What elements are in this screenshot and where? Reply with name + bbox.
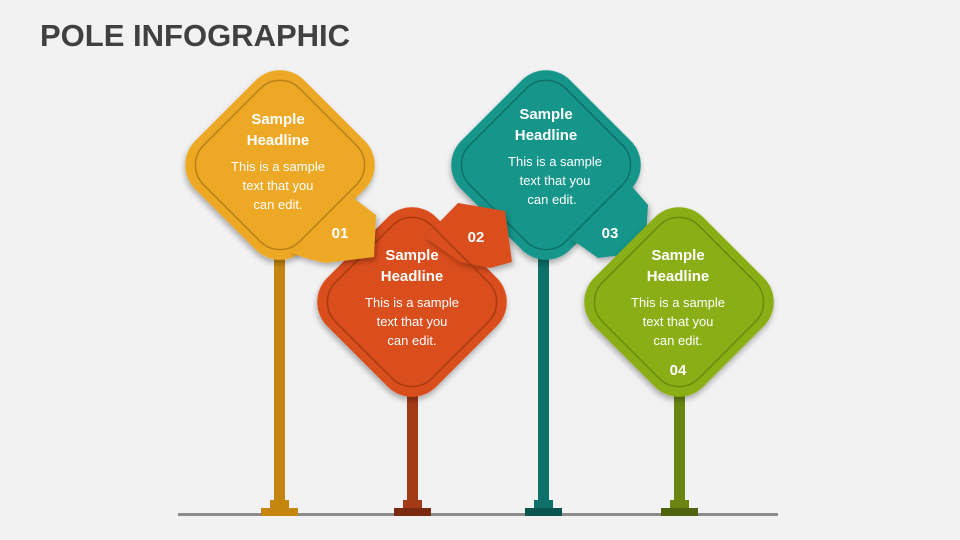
sign 4 green: 04 [670,362,687,379]
sign 1 yellow: This is a sample [231,159,325,174]
sign 3 teal: Headline [515,127,577,144]
sign 4 green: text that you [643,314,713,329]
sign 2 orange: can edit. [387,333,437,348]
pole 2 [394,380,431,516]
sign 3 teal [437,56,655,274]
sign 1 yellow: can edit. [253,197,303,212]
sign 3 teal: Sample [519,106,573,123]
title: POLE INFOGRAPHIC [40,18,350,53]
sign 1 yellow [171,56,389,274]
sign 4 green: Sample [651,247,705,264]
sign 2 orange: Sample [385,247,439,264]
sign 1 yellow: 01 [332,225,348,242]
sign 4 green: Headline [647,268,709,285]
sign 2 orange: Headline [381,268,443,285]
sign 4 green: This is a sample [631,295,725,310]
sign 3 teal: can edit. [527,192,577,207]
sign 2 orange: text that you [377,314,447,329]
pole 4 [661,380,698,516]
sign 1 yellow: text that you [243,178,313,193]
sign 2 orange [303,193,521,411]
ground line [178,513,778,516]
sign 4 green [570,193,788,411]
sign 3 teal: text that you [520,173,590,188]
sign 3 teal: 03 [602,225,618,242]
sign 1 yellow: Sample [251,111,305,128]
sign 2 orange: This is a sample [365,295,459,310]
pole 1 [261,240,298,516]
sign 2 orange: 02 [468,229,484,246]
sign 3 teal: This is a sample [508,154,602,169]
sign 4 green: can edit. [653,333,703,348]
sign 1 yellow: Headline [247,132,309,149]
pole 3 [525,240,562,516]
